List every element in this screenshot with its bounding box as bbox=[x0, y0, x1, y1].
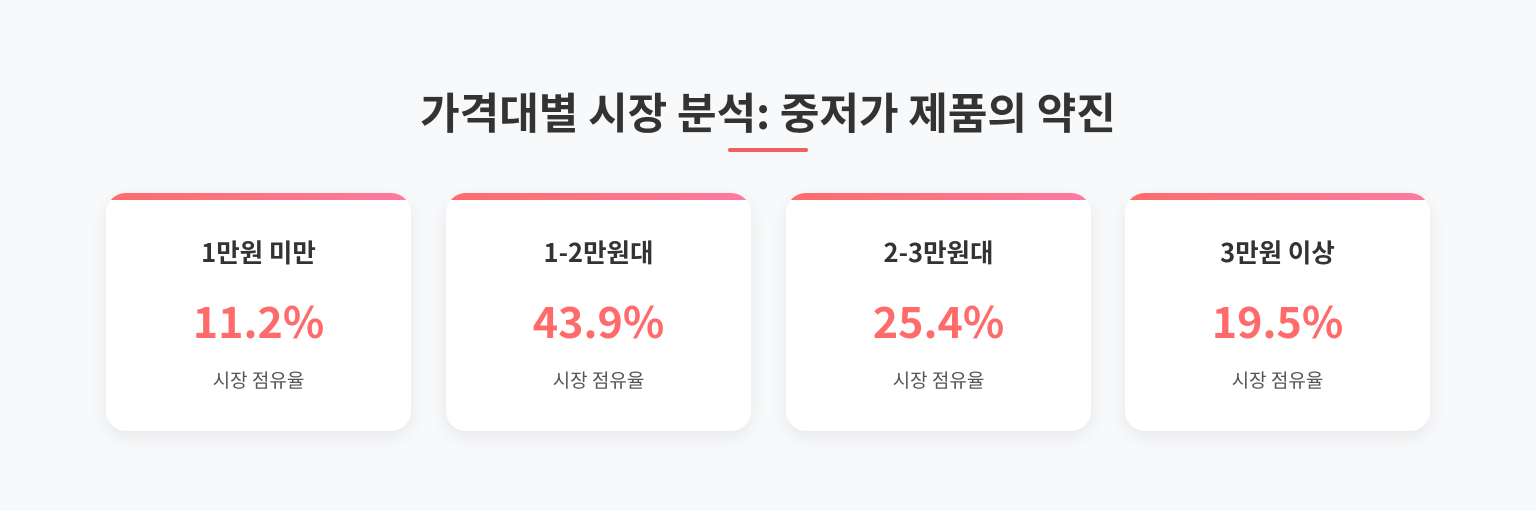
card heading: 1-2만원대 bbox=[544, 233, 653, 270]
percentage: 11.2% bbox=[193, 289, 324, 351]
title underline bbox=[728, 148, 808, 152]
label: 시장 점유율 bbox=[1232, 366, 1323, 393]
card: over 30k bbox=[1125, 193, 1430, 431]
label: 시장 점유율 bbox=[893, 366, 984, 393]
title: 가격대별 시장 분석: 중저가 제품의 약진 bbox=[420, 80, 1116, 142]
card: 20-30k bbox=[786, 193, 1091, 431]
percentage: 19.5% bbox=[1212, 289, 1343, 351]
card: under 10k bbox=[106, 193, 411, 431]
percentage: 25.4% bbox=[873, 289, 1004, 351]
label: 시장 점유율 bbox=[213, 366, 304, 393]
card heading: 2-3만원대 bbox=[884, 233, 993, 270]
card heading: 1만원 미만 bbox=[201, 233, 316, 270]
label: 시장 점유율 bbox=[553, 366, 644, 393]
percentage: 43.9% bbox=[533, 289, 664, 351]
card: 10-20k bbox=[446, 193, 751, 431]
card heading: 3만원 이상 bbox=[1220, 233, 1335, 270]
